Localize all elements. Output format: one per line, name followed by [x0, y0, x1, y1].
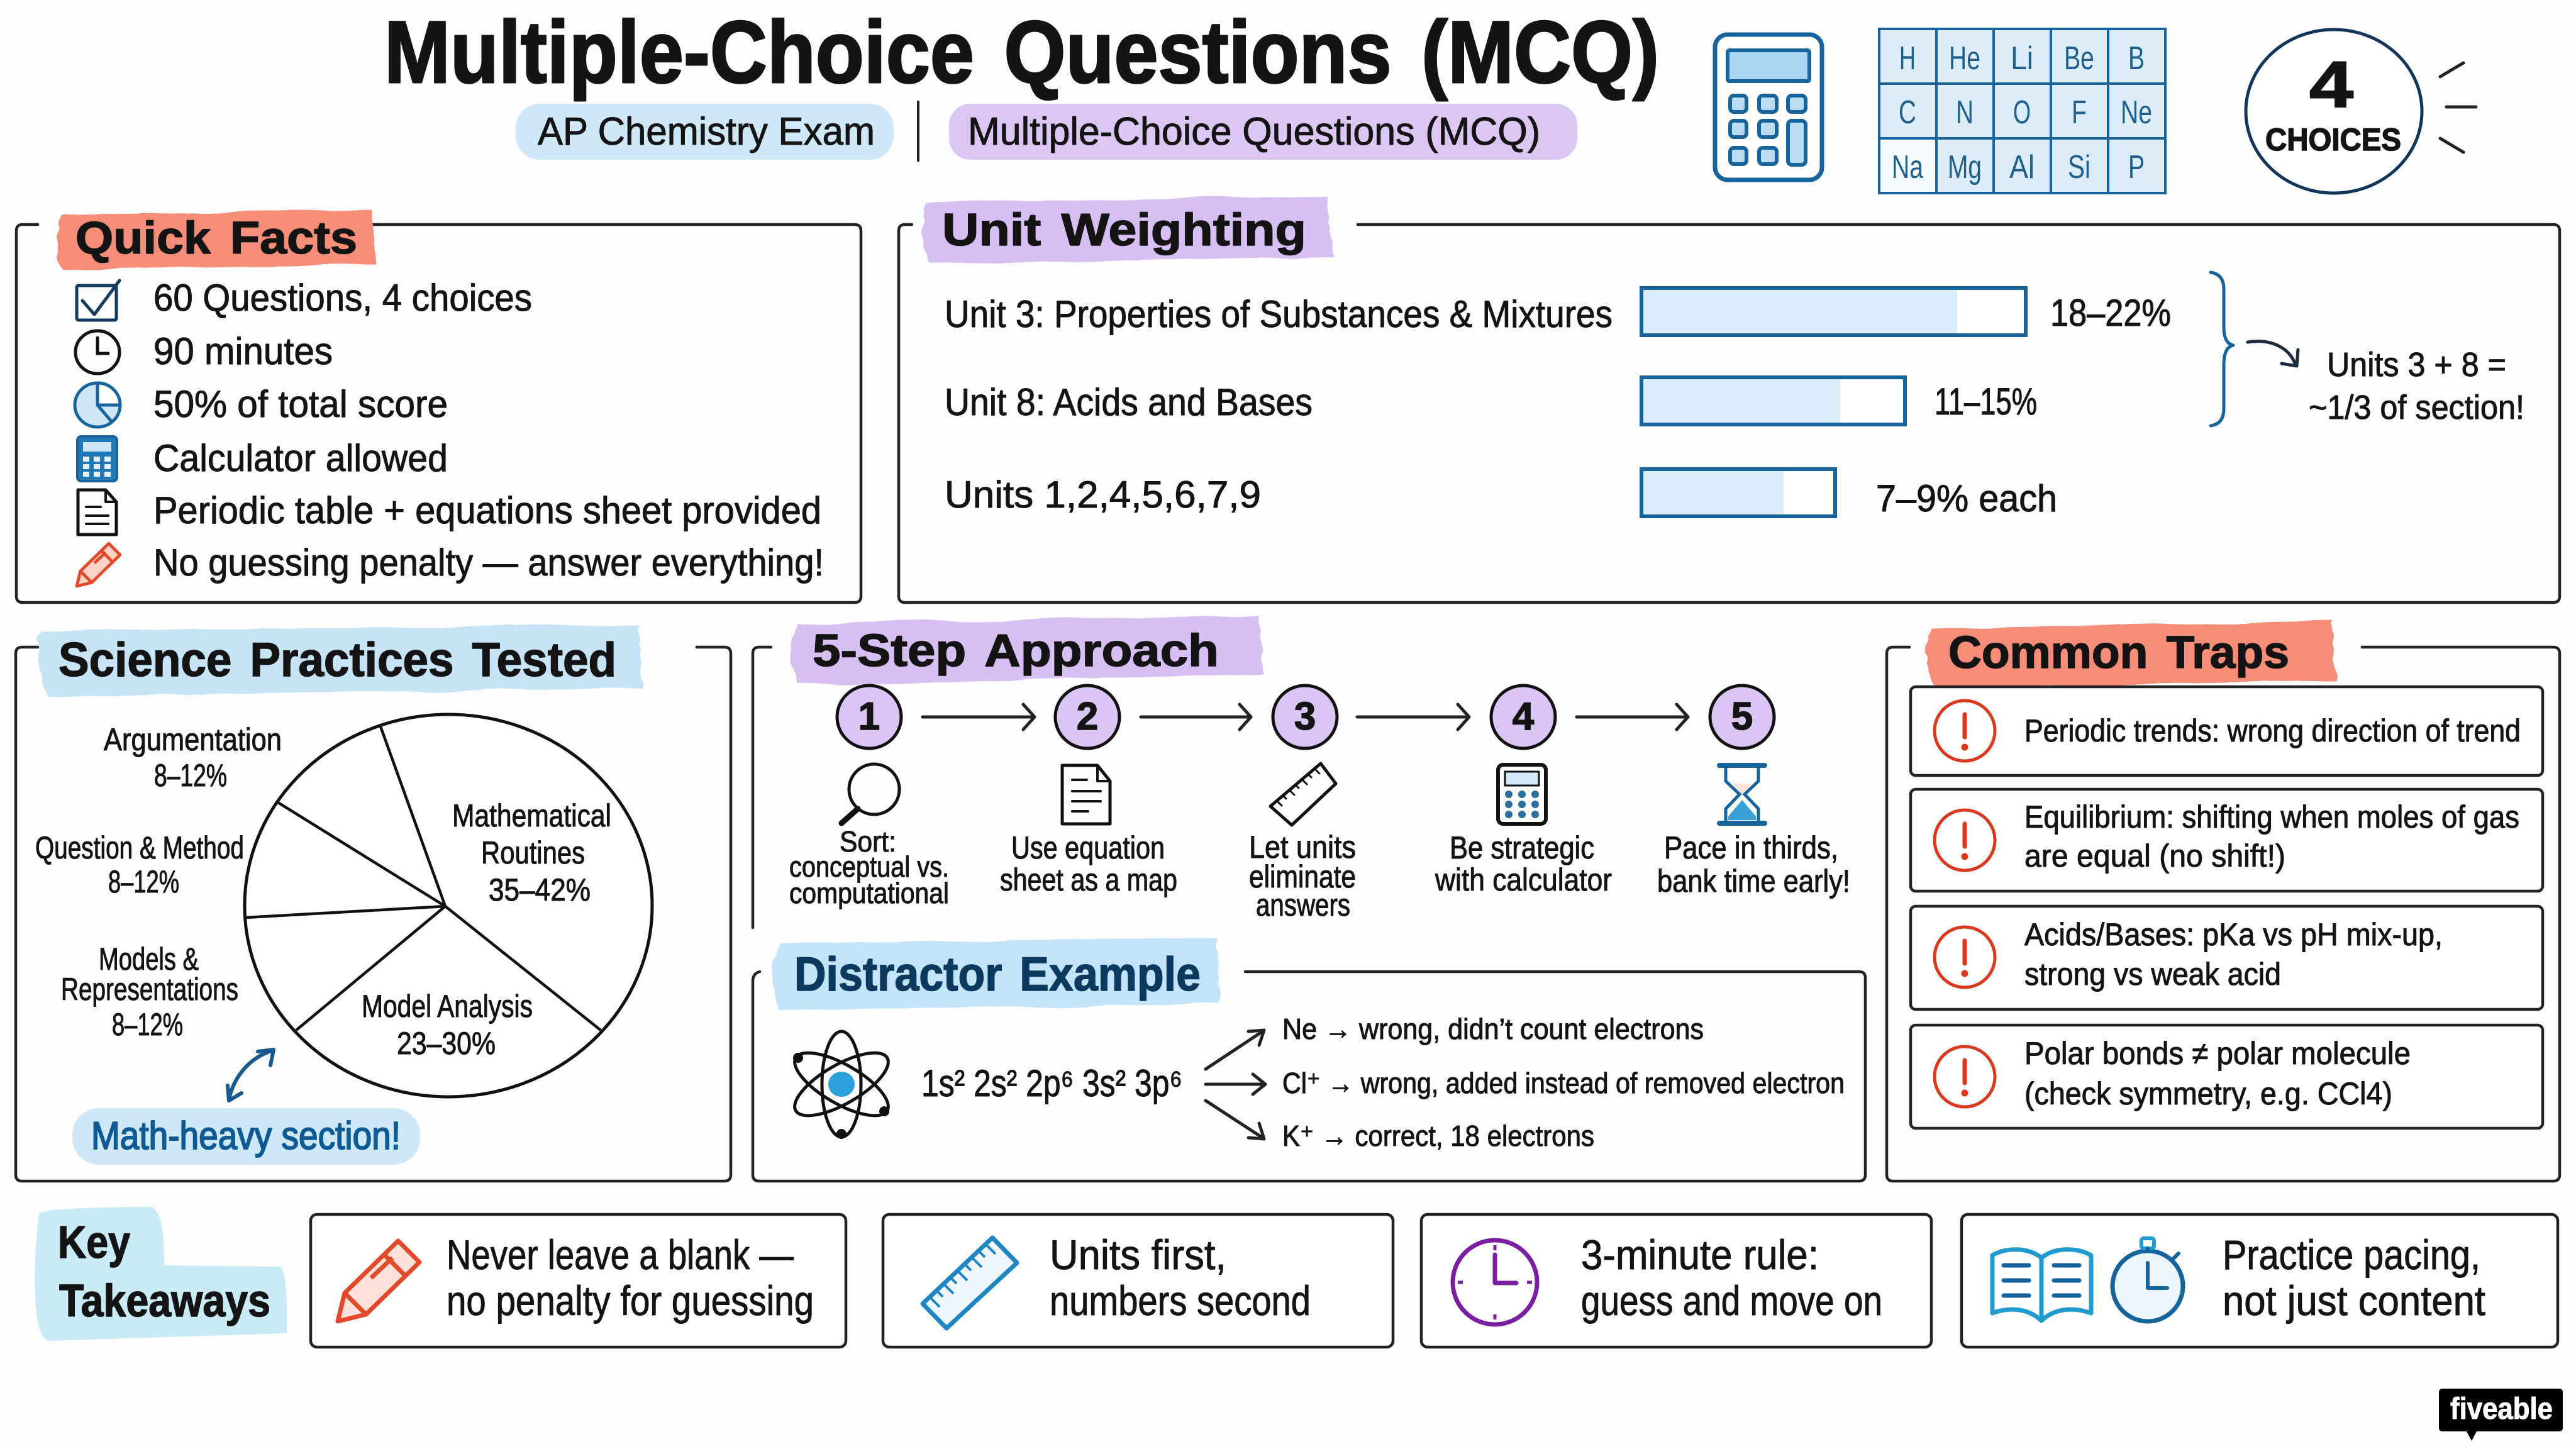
label: models and representations: Models &	[99, 941, 199, 977]
takeaway: 3-minute rule: guess and move on	[1581, 1277, 1882, 1324]
panel: 5-step approach	[753, 616, 1850, 928]
takeaway: practice pacing: not just content	[2223, 1277, 2485, 1324]
callout: math-heavy section: Math-heavy section!	[91, 1114, 401, 1158]
electron configuration: 1s² 2s² 2p⁶ 3s² 3p⁶	[921, 1062, 1182, 1104]
arrow: step 1 to 2	[923, 704, 1035, 730]
icon: pie	[75, 383, 120, 427]
heading: science practices: Science Practices Tested	[58, 633, 616, 687]
step 3: Let units	[1249, 830, 1356, 865]
icon: purple clock	[1453, 1240, 1537, 1324]
label: argumentation: Argumentation	[104, 722, 282, 757]
label: argumentation: 8–12%	[154, 758, 227, 793]
label: argumentation	[104, 722, 282, 793]
periodic table: B	[2128, 40, 2145, 77]
periodic table: He	[1949, 40, 1980, 77]
row: other units: 7–9% each	[1876, 477, 2057, 519]
icon: pencil	[338, 1241, 419, 1321]
heading: distractor example	[772, 936, 1220, 1011]
icon: document	[78, 490, 116, 535]
badge: 4 choices	[2246, 30, 2476, 193]
step 4: 4	[1513, 695, 1535, 738]
trap 1: Periodic trends: wrong direction of trend	[2024, 713, 2521, 748]
label: question and method	[35, 830, 244, 899]
label: mathematical routines	[452, 798, 611, 908]
trap 3: strong vs weak acid	[2024, 957, 2281, 992]
periodic table: Si	[2068, 149, 2090, 186]
heading: distractor example: Distractor Example	[794, 948, 1201, 1001]
choice: Ne: Ne → wrong, didn’t count electrons	[1282, 1013, 1704, 1045]
icon: clock	[75, 331, 119, 374]
label: mathematical routines: Mathematical	[452, 798, 611, 833]
step 2: 2	[1077, 695, 1098, 738]
row: unit 8: Unit 8: Acids and Bases	[945, 381, 1313, 423]
arrows: answer choices	[1206, 1030, 1265, 1139]
icon: checkbox	[77, 280, 119, 320]
step 4	[1435, 686, 1612, 897]
heading: key takeaways: Key	[58, 1218, 130, 1268]
periodic table	[1879, 29, 2165, 193]
heading: quick facts: Quick Facts	[75, 213, 357, 264]
arrow: step 3 to 4	[1357, 704, 1469, 730]
fact: 90 minutes: 90 minutes	[153, 330, 333, 372]
periodic table: Al	[2009, 149, 2035, 186]
step 2	[1000, 686, 1177, 897]
trap 4	[1911, 1025, 2543, 1128]
heading: unit weighting: Unit Weighting	[942, 205, 1306, 255]
panel: quick facts	[16, 209, 861, 602]
note: units 3 + 8	[2309, 346, 2524, 426]
step 3	[1249, 686, 1356, 923]
badge: 4 choices: CHOICES	[2265, 122, 2401, 157]
step 4: Be strategic	[1450, 830, 1594, 865]
row: unit 3	[945, 288, 2171, 335]
periodic table: N	[1956, 94, 1974, 131]
periodic table: Mg	[1948, 149, 1982, 186]
fact: 50 percent: 50% of total score	[153, 383, 448, 425]
label: model analysis: 23–30%	[397, 1026, 496, 1061]
fact: calculator: Calculator allowed	[153, 437, 448, 479]
step 2: Use equation	[1011, 830, 1165, 865]
step 3: answers	[1256, 887, 1350, 923]
icon: small calculator	[77, 436, 117, 481]
periodic table: H	[1899, 40, 1916, 77]
takeaway: practice pacing	[1962, 1214, 2558, 1347]
row: unit 3: 18–22%	[2050, 292, 2171, 334]
periodic table: Li	[2011, 40, 2033, 77]
heading: unit weighting	[922, 196, 1333, 263]
trap 2	[1911, 789, 2543, 891]
arrow: callout to pie	[228, 1050, 274, 1101]
heading: common traps	[1926, 620, 2336, 687]
fact: no guessing penalty: No guessing penalty — answer everything!	[153, 541, 824, 584]
panel: science practices	[16, 624, 731, 1181]
row: unit 3: Unit 3: Properties of Substances & Mixtures	[945, 293, 1613, 335]
periodic table: Na	[1892, 149, 1923, 186]
takeaway: 3-minute rule: 3-minute rule:	[1581, 1231, 1819, 1278]
trap 4: Polar bonds ≠ polar molecule	[2024, 1036, 2411, 1071]
takeaway: never leave a blank: no penalty for guessing	[447, 1277, 814, 1324]
step 2: sheet as a map	[1000, 862, 1177, 897]
step 3: eliminate	[1249, 859, 1356, 894]
icon: ruler	[923, 1238, 1017, 1328]
heading: common traps: Common Traps	[1948, 628, 2289, 678]
choice: Cl+: Cl⁺ → wrong, added instead of removed electron	[1282, 1067, 1845, 1099]
trap 3	[1911, 906, 2543, 1009]
takeaway: units first	[883, 1214, 1393, 1347]
takeaway: units first: Units first,	[1050, 1231, 1226, 1278]
step 5: Pace in thirds,	[1664, 830, 1838, 865]
step 1: Sort:	[840, 825, 896, 858]
icon: stopwatch	[2112, 1238, 2183, 1321]
panel: unit weighting	[899, 196, 2560, 602]
periodic table: C	[1899, 94, 1916, 131]
periodic table: P	[2128, 149, 2145, 186]
label: models and representations: 8–12%	[112, 1007, 183, 1042]
brace	[2211, 272, 2233, 426]
icon: small pencil	[77, 543, 120, 586]
heading: key takeaways	[35, 1207, 287, 1341]
icon: atom	[786, 1031, 897, 1139]
subtitle pill: AP Chemistry Exam: AP Chemistry Exam	[538, 110, 875, 153]
step 1: conceptual vs.	[789, 850, 949, 883]
logo: fiveable	[2439, 1389, 2563, 1441]
row: other units	[945, 469, 2057, 519]
step 3: 3	[1294, 695, 1316, 738]
subtitle pill: Multiple-Choice Questions: Multiple-Choice Questions (MCQ)	[968, 110, 1540, 153]
heading: key takeaways: Takeaways	[59, 1276, 270, 1326]
trap 3: Acids/Bases: pKa vs pH mix-up,	[2024, 917, 2443, 952]
arrow: step 2 to 3	[1141, 704, 1251, 730]
periodic table: F	[2072, 94, 2087, 131]
step 1: 1	[858, 695, 880, 738]
icon: calculator	[1715, 35, 1822, 180]
note: units 3 + 8: ~1/3 of section!	[2309, 389, 2524, 426]
row: unit 8	[945, 377, 2037, 425]
arrow: step 4 to 5	[1577, 704, 1688, 730]
label: question and method: Question & Method	[35, 830, 244, 865]
note: units 3 + 8: Units 3 + 8 =	[2327, 346, 2506, 384]
takeaway: practice pacing: Practice pacing,	[2223, 1231, 2480, 1278]
callout: math-heavy section	[72, 1108, 420, 1165]
panel: distractor example	[753, 936, 1865, 1181]
heading: 5-step approach	[791, 616, 1263, 684]
label: model analysis	[362, 989, 533, 1061]
trap 1	[1911, 687, 2543, 775]
step 1: computational	[789, 877, 949, 909]
label: question and method: 8–12%	[108, 864, 179, 899]
periodic table: Ne	[2121, 94, 2152, 131]
takeaway: never leave a blank: Never leave a blank —	[447, 1231, 794, 1278]
takeaway: 3-minute rule	[1421, 1214, 1931, 1347]
label: models and representations	[61, 941, 238, 1042]
heading: quick facts	[57, 209, 376, 270]
heading: 5-step approach: 5-Step Approach	[813, 626, 1219, 676]
label: mathematical routines: 35–42%	[489, 872, 591, 908]
row: other units: Units 1,2,4,5,6,7,9	[945, 474, 1261, 516]
row: unit 8: 11–15%	[1935, 380, 2037, 423]
takeaway: units first: numbers second	[1050, 1277, 1311, 1324]
label: model analysis: Model Analysis	[362, 989, 533, 1024]
step 4: with calculator	[1435, 862, 1612, 897]
fact: 60 questions: 60 Questions, 4 choices	[153, 277, 532, 319]
trap 2: Equilibrium: shifting when moles of gas	[2024, 799, 2519, 835]
title: Multiple-Choice Questions (MCQ)	[384, 3, 1659, 101]
label: models and representations: Representations	[61, 972, 238, 1007]
periodic table: Be	[2064, 40, 2094, 77]
trap 4: (check symmetry, e.g. CCl4)	[2024, 1076, 2392, 1111]
arrow: brace to note	[2248, 341, 2298, 366]
icon: open book	[1992, 1250, 2091, 1321]
fact: periodic table: Periodic table + equations sheet provided	[153, 489, 821, 531]
choice: K+: K⁺ → correct, 18 electrons	[1282, 1119, 1594, 1152]
step 5	[1657, 686, 1850, 899]
trap 2: are equal (no shift!)	[2024, 838, 2285, 874]
step 5: 5	[1731, 695, 1753, 738]
pie chart	[245, 714, 652, 1097]
label: mathematical routines: Routines	[481, 835, 585, 870]
takeaway: never leave a blank	[311, 1214, 846, 1347]
logo: fiveable: fiveable	[2450, 1392, 2553, 1426]
panel: common traps	[1887, 620, 2560, 1181]
periodic table: O	[2013, 94, 2031, 131]
step 5: bank time early!	[1657, 863, 1850, 899]
step 1	[789, 686, 949, 909]
badge: 4 choices: 4	[2309, 48, 2353, 121]
